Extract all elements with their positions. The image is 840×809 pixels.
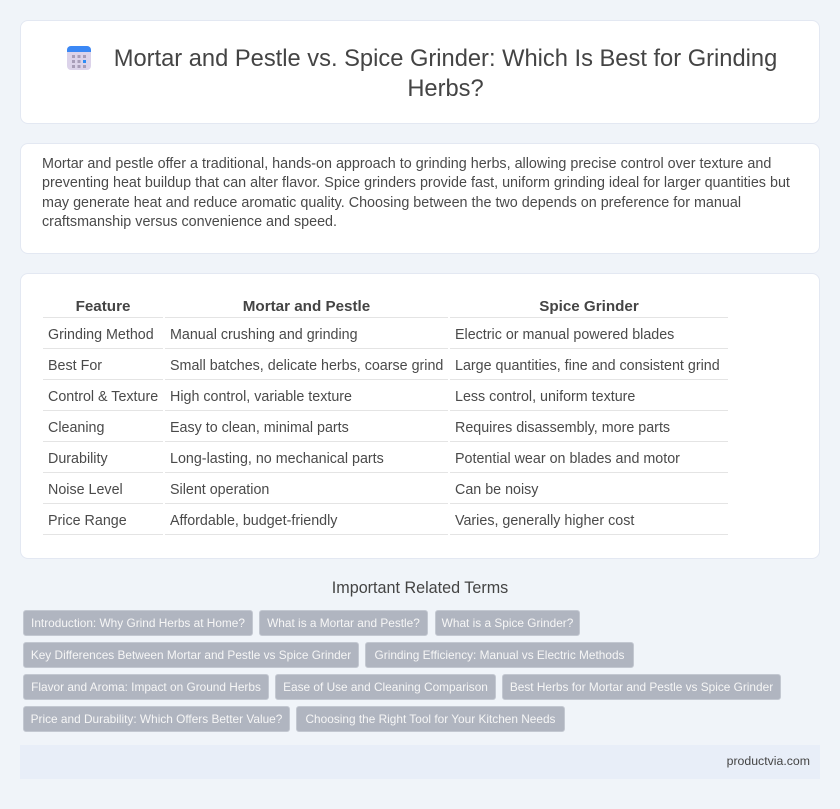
title: Herbs?: [407, 76, 484, 102]
tag: What is a Mortar and Pestle?: [267, 616, 420, 630]
text block: introduction: craftsmanship versus convenience and speed.: [42, 214, 337, 230]
row: Price Range: Affordable, budget-friendly: [170, 513, 337, 529]
title: Mortar and Pestle vs. Spice Grinder: Which Is Best for Grinding: [114, 46, 777, 72]
row: Price Range: Price Range: [48, 513, 127, 529]
tag: [365, 642, 634, 668]
row: Cleaning: [48, 420, 670, 436]
tag: Flavor and Aroma: Impact on Ground Herbs: [31, 680, 261, 694]
row: Grinding Method: [48, 327, 674, 343]
row: Grinding Method: Electric or manual powered blades: [455, 327, 674, 343]
table header: Mortar and Pestle: Mortar and Pestle: [243, 298, 370, 315]
icon: calendar: [67, 46, 91, 70]
tag: Price and Durability: Which Offers Better Value?: [31, 712, 282, 726]
row: Control & Texture: Less control, uniform texture: [455, 389, 635, 405]
footer: [20, 745, 820, 779]
text block: introduction: may generate heat and reduce aromatic quality. Choosing between the two depends on preference for manual: [42, 194, 741, 210]
tag: Ease of Use and Cleaning Comparison: [283, 680, 488, 694]
tag: [23, 706, 290, 732]
row: Price Range: [48, 513, 634, 529]
row: Control & Texture: [48, 389, 635, 405]
text block: introduction: Mortar and pestle offer a traditional, hands-on approach to grinding herbs, allowing precise control over texture and: [42, 156, 771, 172]
row: Cleaning: Requires disassembly, more parts: [455, 420, 670, 436]
tag: [502, 674, 781, 700]
tag: [259, 610, 428, 636]
row: Cleaning: Easy to clean, minimal parts: [170, 420, 349, 436]
heading: Important Related Terms: Important Related Terms: [332, 579, 508, 597]
row: Grinding Method: Manual crushing and grinding: [170, 327, 358, 343]
tag: Key Differences Between Mortar and Pestle vs Spice Grinder: [31, 648, 351, 662]
row: Best For: [48, 358, 720, 374]
row: Durability: [48, 451, 680, 467]
footer text: source: productvia.com: [727, 754, 810, 768]
tag: Introduction: Why Grind Herbs at Home?: [31, 616, 245, 630]
row: Best For: Large quantities, fine and consistent grind: [455, 358, 720, 374]
row: Grinding Method: Grinding Method: [48, 327, 154, 343]
table header: Feature: Feature: [76, 298, 130, 315]
tag: [435, 610, 580, 636]
text block: introduction: [42, 156, 790, 230]
row: Durability: Long-lasting, no mechanical parts: [170, 451, 384, 467]
row: Best For: Best For: [48, 358, 102, 374]
tag: Choosing the Right Tool for Your Kitchen Needs: [306, 712, 555, 726]
tag: Grinding Efficiency: Manual vs Electric Methods: [375, 648, 624, 662]
tag list: related terms: [23, 610, 781, 732]
row: Control & Texture: Control & Texture: [48, 389, 158, 405]
row: Noise Level: Silent operation: [170, 482, 269, 498]
row: Noise Level: Noise Level: [48, 482, 123, 498]
row: Noise Level: Can be noisy: [455, 482, 538, 498]
row: Noise Level: [48, 482, 538, 498]
title: [114, 46, 777, 102]
tag: [23, 610, 253, 636]
table header: Spice Grinder: Spice Grinder: [539, 298, 639, 315]
tag: [296, 706, 565, 732]
tag: [23, 642, 359, 668]
tag: Best Herbs for Mortar and Pestle vs Spice Grinder: [510, 680, 773, 694]
tag: [23, 674, 269, 700]
panel: comparison table: [20, 273, 820, 559]
text block: introduction: preventing heat buildup that can alter flavor. Spice grinders provide fast, uniform grinding ideal for larger quantities but: [42, 175, 790, 191]
row: Best For: Small batches, delicate herbs, coarse grind: [170, 358, 443, 374]
row: Durability: Durability: [48, 451, 108, 467]
tag: What is a Spice Grinder?: [442, 616, 573, 630]
row: Price Range: Varies, generally higher cost: [455, 513, 634, 529]
panel: introduction: [20, 143, 820, 254]
row: Control & Texture: High control, variable texture: [170, 389, 352, 405]
row: Durability: Potential wear on blades and motor: [455, 451, 680, 467]
row: Cleaning: Cleaning: [48, 420, 104, 436]
tag: [275, 674, 496, 700]
panel: header: [20, 20, 820, 124]
